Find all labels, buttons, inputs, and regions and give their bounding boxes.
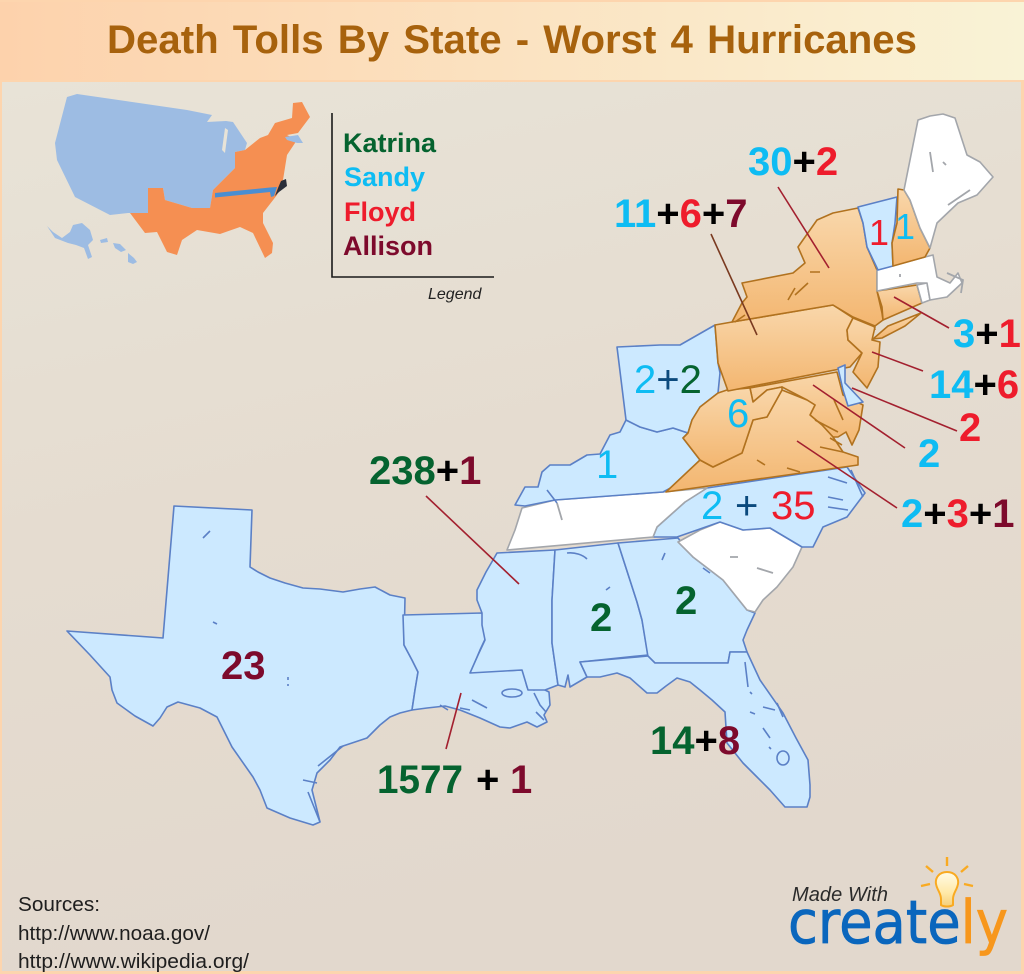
state: Texas xyxy=(67,506,418,825)
state: South Carolina xyxy=(678,522,802,612)
inset map: United States xyxy=(47,94,310,264)
logo: light bulb xyxy=(921,857,973,906)
label: Texas: 23 xyxy=(221,644,266,688)
label: Georgia: 2 xyxy=(675,579,697,623)
label: Delaware: 2 xyxy=(959,406,981,450)
label: Louisiana xyxy=(377,758,532,802)
label: Vermont: 1 xyxy=(869,212,889,253)
label: Kentucky: 1 xyxy=(596,443,618,487)
inset: New England gap xyxy=(285,135,303,143)
inset: Great Lakes xyxy=(222,128,228,153)
label: Louisiana: 1 xyxy=(510,758,532,802)
label: North Carolina: + xyxy=(735,484,758,528)
title banner: Death Tolls By State - Worst 4 Hurricanes xyxy=(107,18,917,62)
label: Pennsylvania: 11+6+7 xyxy=(614,192,748,236)
state: Alabama xyxy=(552,543,648,687)
label: Louisiana: 1577 xyxy=(377,758,463,802)
state: New Hampshire xyxy=(892,189,930,266)
state: Maryland xyxy=(750,372,863,445)
state: West Virginia xyxy=(683,387,782,467)
legend: Katrina: Katrina xyxy=(343,128,437,158)
label: West Virginia: 6 xyxy=(727,392,749,436)
label: Maryland: 2 xyxy=(918,432,940,476)
leader lines xyxy=(426,187,957,749)
state: Long Island xyxy=(873,313,921,339)
legend: Floyd: Floyd xyxy=(344,197,416,227)
legend caption: Legend xyxy=(428,286,482,303)
inset: Alaska xyxy=(47,223,93,259)
inset: Hawaii xyxy=(100,238,137,264)
state: Louisiana xyxy=(403,613,550,728)
state: Delaware xyxy=(838,365,863,406)
state: New Jersey xyxy=(847,318,880,388)
label: Connecticut: 3+1 xyxy=(953,312,1021,356)
label: North Carolina: 35 xyxy=(771,484,816,528)
state: Massachusetts xyxy=(877,255,962,300)
label: North Carolina xyxy=(701,484,816,528)
state: Ohio xyxy=(617,325,720,433)
state: North Carolina xyxy=(653,467,865,547)
state: Pennsylvania xyxy=(715,305,862,391)
label: New York: 30+2 xyxy=(748,140,838,184)
state: Kentucky xyxy=(515,420,700,506)
state: New York xyxy=(732,208,883,326)
label: Louisiana: + xyxy=(476,758,499,802)
state: Virginia xyxy=(666,390,858,492)
state: Vermont xyxy=(858,197,897,270)
state: Mississippi xyxy=(470,550,558,690)
label: Mississippi: 238+1 xyxy=(369,449,481,493)
state: Maine xyxy=(904,114,993,248)
inland waters and coast detail xyxy=(203,470,863,822)
state: Georgia xyxy=(618,538,755,663)
label: New Jersey: 14+6 xyxy=(929,363,1019,407)
label: New Hampshire: 1 xyxy=(895,206,915,247)
legend: Sandy: Sandy xyxy=(344,162,425,192)
state: Connecticut xyxy=(877,285,922,320)
inset: hurricane states xyxy=(130,102,310,258)
legend: Allison: Allison xyxy=(343,231,433,261)
inset: landfall point xyxy=(275,179,287,196)
state: Tennessee xyxy=(507,488,707,550)
legend xyxy=(332,113,494,303)
label: Ohio: 2+2 xyxy=(634,358,702,402)
inset: unaffected states xyxy=(55,94,247,215)
Creately logo xyxy=(788,857,1008,958)
sources xyxy=(18,894,249,973)
inset: storm track xyxy=(215,187,277,198)
label: Virginia: 2+3+1 xyxy=(901,492,1014,536)
map: eastern states xyxy=(67,114,993,825)
label: Alabama: 2 xyxy=(590,596,612,640)
label: Florida: 14+8 xyxy=(650,719,740,763)
sources: http://www.noaa.gov/ xyxy=(18,923,210,945)
sources: http://www.wikipedia.org/ xyxy=(18,951,249,973)
sources: Sources: xyxy=(18,894,100,916)
state: Rhode Island xyxy=(917,283,930,303)
state: Florida xyxy=(580,652,810,807)
logo: made with: Made With xyxy=(792,884,888,906)
title banner xyxy=(0,2,1024,80)
label: North Carolina: 2 xyxy=(701,484,723,528)
logo: creately wordmark: creately xyxy=(788,888,1008,958)
